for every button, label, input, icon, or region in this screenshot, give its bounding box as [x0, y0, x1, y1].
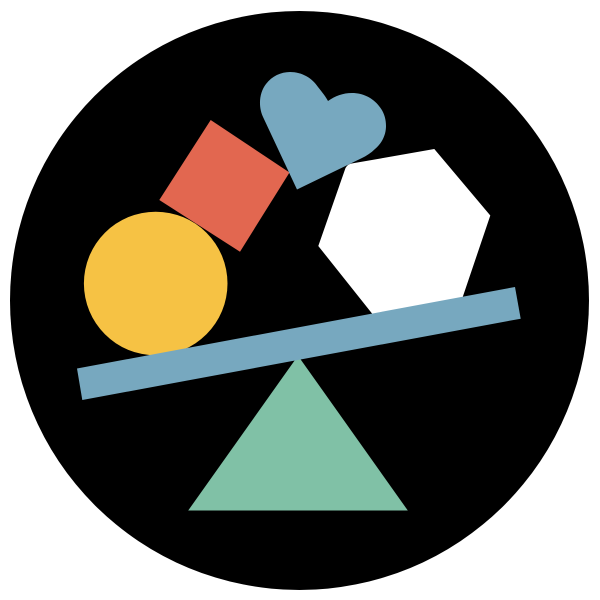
yellow circle — [84, 212, 228, 355]
blue heart — [260, 72, 386, 190]
seesaw beam — [77, 287, 521, 400]
white hexagon — [318, 149, 490, 316]
red square — [159, 120, 290, 252]
triangle fulcrum — [188, 356, 408, 510]
